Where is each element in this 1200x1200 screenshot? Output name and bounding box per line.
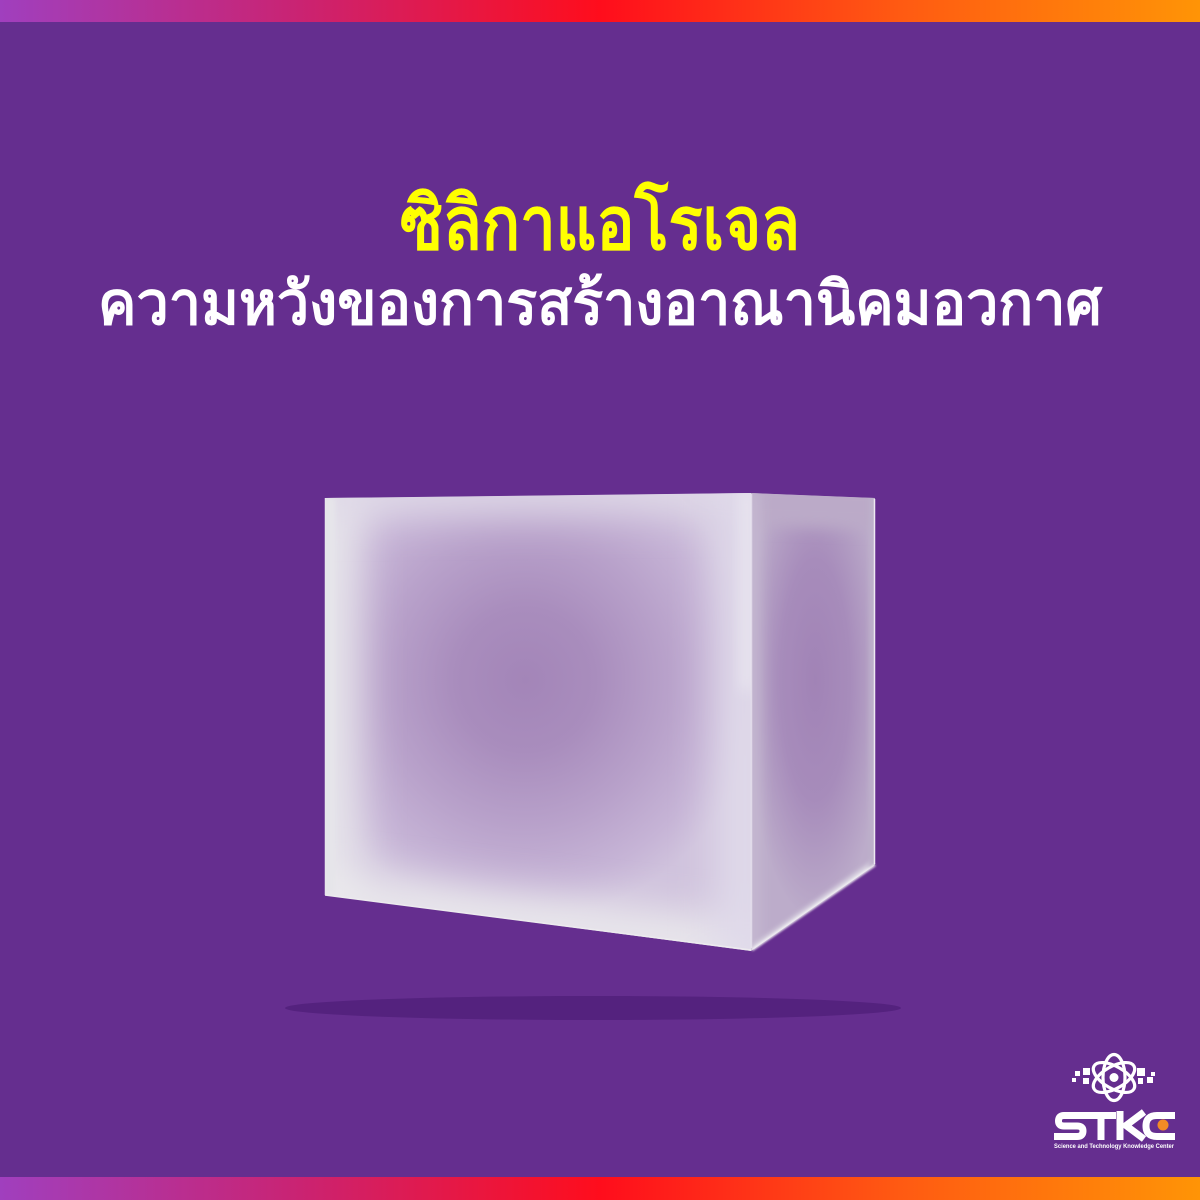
subtitle: ความหวังของการสร้างอาณานิคมอวกาศ bbox=[98, 270, 1103, 337]
top gradient bar bbox=[0, 0, 1200, 22]
logo wordmark bbox=[1054, 1111, 1175, 1140]
cube edge highlights bbox=[325, 494, 875, 950]
ground shadow bbox=[285, 996, 901, 1020]
logo orange dot bbox=[1158, 1120, 1168, 1130]
logo tagline: Science and Technology Knowledge Center bbox=[1054, 1144, 1175, 1150]
cube front face bbox=[326, 493, 751, 951]
bottom gradient bar bbox=[0, 1177, 1200, 1200]
icon: pixel dots bbox=[1072, 1068, 1155, 1084]
aerogel cube bbox=[324, 493, 877, 952]
cube right face bbox=[751, 493, 875, 951]
logo: STKC bbox=[1054, 1054, 1175, 1150]
icon: atom bbox=[1089, 1054, 1139, 1100]
title: ซิลิกาแอโรเจล bbox=[400, 180, 800, 265]
